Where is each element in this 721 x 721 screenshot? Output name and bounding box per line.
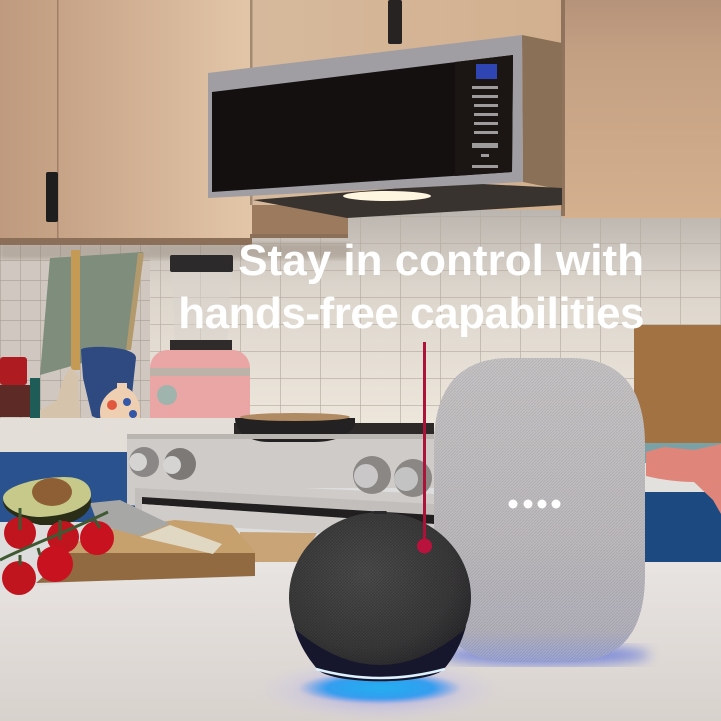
headline: hands-free capabilities <box>178 289 644 338</box>
microwave <box>208 35 562 218</box>
shelf items: boards, bowls, jar, cloth <box>0 250 144 425</box>
upper cabinets <box>0 0 721 245</box>
back counter <box>0 418 721 567</box>
towel <box>646 444 721 514</box>
headline: Stay in control with <box>238 236 644 285</box>
stove <box>127 413 434 540</box>
cutting board <box>36 500 317 583</box>
tomatoes <box>0 508 114 595</box>
blender <box>148 255 250 432</box>
tiled backsplash <box>0 205 721 440</box>
headline <box>178 236 644 338</box>
avocado <box>3 477 91 525</box>
wooden board behind the speaker <box>634 325 721 443</box>
callout line with dot <box>417 342 432 554</box>
smart display speaker <box>434 358 650 665</box>
spherical smart speaker <box>255 511 505 721</box>
front counter <box>0 562 721 721</box>
